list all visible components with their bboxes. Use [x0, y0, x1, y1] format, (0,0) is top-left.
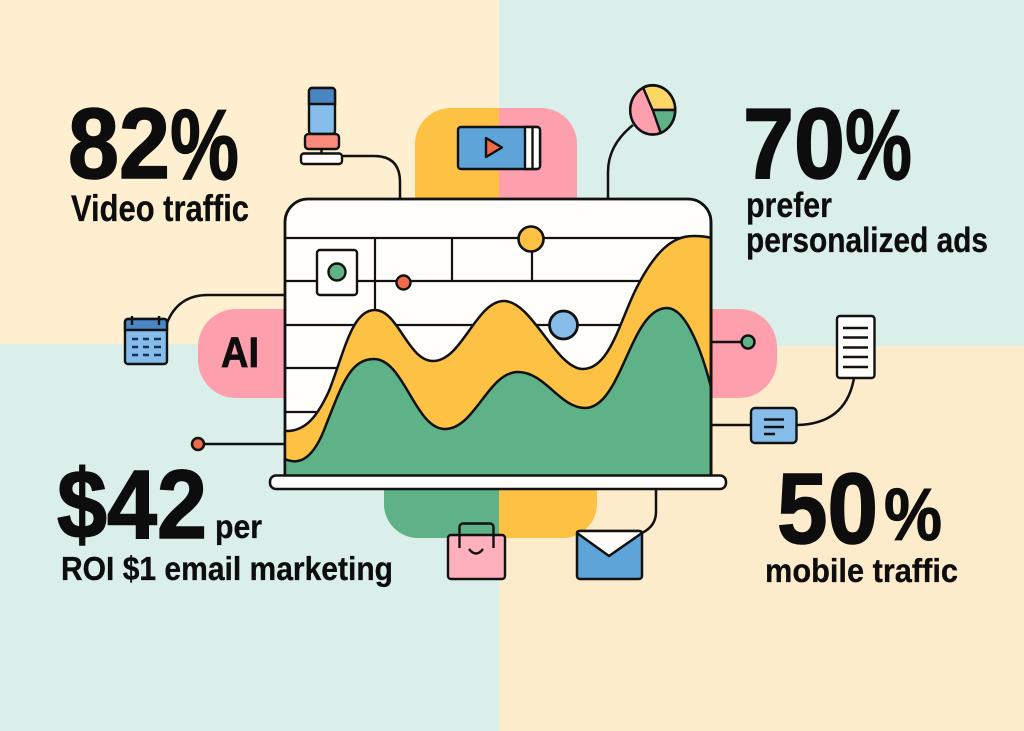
stat: 50% mobile traffic	[765, 453, 958, 589]
stat: 50% mobile traffic: 50	[777, 453, 878, 565]
stat: $42 per $1 email marketing: $42	[57, 450, 207, 559]
stat: 70% prefer personalized ads: %	[845, 89, 912, 201]
stat: 70% prefer personalized ads: 70	[743, 88, 845, 200]
panel: right pink tab	[711, 309, 777, 398]
stat: 70% prefer personalized ads	[743, 88, 988, 260]
icon: green dot	[742, 336, 754, 348]
label: AI: AI	[221, 329, 259, 377]
stat: 82% video traffic: Video traffic	[71, 188, 249, 229]
area: yellow series	[285, 236, 711, 476]
marker: red dot	[396, 276, 410, 290]
chart grid	[285, 238, 700, 412]
monitor base	[270, 476, 726, 489]
icon: calendar	[125, 316, 167, 364]
panel: bottom colored tab	[384, 489, 597, 538]
panel: AI tab	[198, 309, 285, 398]
icon: video player	[458, 127, 540, 169]
icon: document	[837, 316, 874, 378]
chart: monitor with area chart	[270, 199, 726, 489]
stat: 82% video traffic	[68, 88, 249, 229]
icon: message box	[751, 408, 796, 443]
icon: shopping bag	[448, 524, 505, 579]
marker: square with green dot	[317, 250, 357, 295]
marker: blue dot	[550, 311, 578, 339]
stat: 82% video traffic: %	[170, 89, 239, 201]
stat: 70% prefer personalized ads: personalized ads	[746, 221, 988, 260]
stat: 82% video traffic: 82	[68, 88, 170, 200]
stat: 50% mobile traffic: mobile traffic	[765, 552, 958, 589]
stat: $42 per $1 email marketing: ROI $1 email marketing	[61, 550, 393, 587]
stat: $42 per $1 email marketing: per	[215, 508, 262, 545]
panel: top colored tab	[415, 108, 577, 199]
area: green series	[285, 308, 711, 476]
icon: microphone	[301, 88, 342, 164]
stat: 50% mobile traffic: %	[884, 473, 942, 556]
connector lines	[167, 125, 854, 533]
icon: pie chart	[630, 85, 675, 134]
stat: 70% prefer personalized ads: prefer	[746, 186, 832, 225]
icon: orange dot	[192, 438, 204, 450]
stat: $42 per $1 email marketing	[57, 450, 393, 587]
icon: envelope	[577, 531, 642, 579]
marker: yellow dot	[518, 226, 544, 252]
